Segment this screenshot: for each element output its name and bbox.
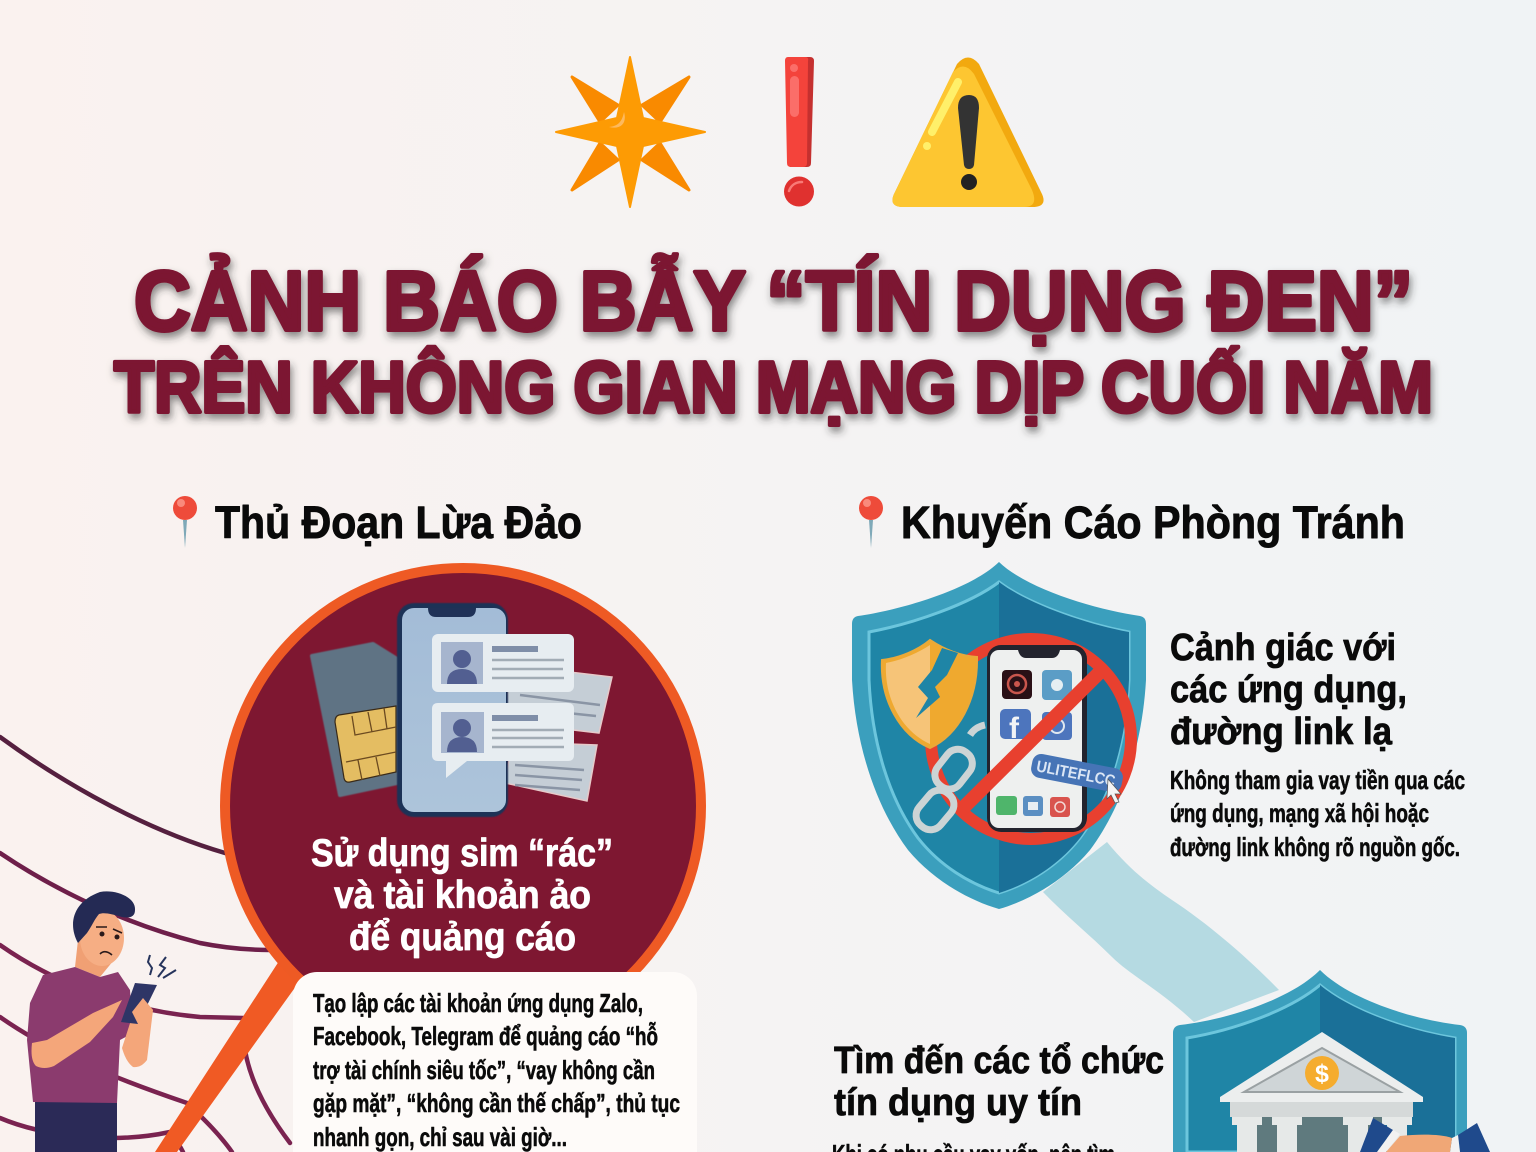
illustration: worried man with phone xyxy=(27,891,176,1152)
cursor xyxy=(1107,779,1121,803)
text: be alert advice xyxy=(1170,627,1465,862)
heading: scam tactics: Thủ Đoạn Lừa Đảo xyxy=(215,497,582,548)
icon: profile message bottom xyxy=(432,703,574,778)
bank door xyxy=(1257,1117,1383,1152)
vibration marks xyxy=(148,955,176,978)
prohibition ring xyxy=(931,639,1131,839)
prohibition slash xyxy=(963,672,1100,808)
neck xyxy=(75,940,118,977)
shield xyxy=(1173,970,1467,1152)
phone: f xyxy=(1009,712,1020,745)
text: be alert advice: Cảnh giác với xyxy=(1170,627,1396,669)
icon: shield crossed app xyxy=(852,562,1146,909)
icon: smartphone xyxy=(397,603,508,817)
face xyxy=(80,910,124,966)
left arm xyxy=(32,1000,122,1068)
broken gold shield xyxy=(882,640,977,748)
white card with description: Facebook, Telegram để quảng cáo “hỗ xyxy=(313,1021,658,1051)
white card with description xyxy=(293,972,697,1152)
white card with description: trợ tài chính siêu tốc”, “vay không cần xyxy=(313,1055,655,1085)
phone xyxy=(987,645,1087,832)
white card with description: Tạo lập các tài khoản ứng dụng Zalo, xyxy=(313,988,643,1018)
eyes and mouth xyxy=(96,927,122,955)
white card with description: nhanh gọn, chỉ sau vài giờ... xyxy=(313,1122,567,1152)
bank columns xyxy=(1232,1117,1412,1152)
phone xyxy=(121,983,157,1024)
heading: prevention advice: Khuyến Cáo Phòng Tránh xyxy=(901,497,1405,548)
coin xyxy=(1305,1056,1339,1090)
bank entablature xyxy=(1230,1102,1413,1117)
bank roof xyxy=(1220,1032,1423,1102)
title: CẢNH BÁO BẪY “TÍN DỤNG ĐEN” xyxy=(134,254,1413,348)
hand on phone xyxy=(132,998,153,1030)
text: trusted lenders advice: tín dụng uy tín xyxy=(834,1082,1082,1124)
red circle xyxy=(225,568,701,1044)
shield xyxy=(852,562,1146,909)
icon: yellow warning triangle xyxy=(892,58,1044,207)
URL pill: ULITEFLCC xyxy=(1035,758,1117,790)
panel: scam speech bubble xyxy=(155,568,701,1152)
handshake xyxy=(1360,1118,1490,1152)
icon: back message cards xyxy=(505,665,612,801)
circle heading: Sử dụng sim “rác” xyxy=(311,832,613,875)
circle heading: để quảng cáo xyxy=(349,916,576,959)
icon: orange star xyxy=(556,57,705,207)
web of debt lines xyxy=(0,737,290,1152)
right arm xyxy=(122,997,153,1067)
icon: shield with bank and handshake: $ xyxy=(1315,1060,1329,1088)
icon: red exclamation mark xyxy=(784,57,814,206)
circle heading xyxy=(311,832,613,959)
icon: profile message top xyxy=(432,634,574,692)
icon: SIM card xyxy=(312,644,397,795)
text: be alert advice: các ứng dụng, xyxy=(1170,669,1407,711)
text: be alert advice: ứng dụng, mạng xã hội hoặc xyxy=(1170,798,1429,828)
circle heading: và tài khoản ảo xyxy=(334,874,591,917)
title xyxy=(114,254,1433,428)
icon: shield with bank and handshake xyxy=(1173,970,1490,1152)
broken chain xyxy=(911,725,985,835)
text: be alert advice: đường link lạ xyxy=(1170,711,1393,753)
text: trusted lenders advice: Tìm đến các tổ chức xyxy=(834,1040,1164,1082)
connector ribbon xyxy=(1043,842,1279,1022)
hair xyxy=(73,891,135,943)
title: TRÊN KHÔNG GIAN MẠNG DỊP CUỐI NĂM xyxy=(114,346,1433,428)
shirt xyxy=(27,967,133,1103)
white card with description: gặp mặt”, “không cần thế chấp”, thủ tục xyxy=(313,1088,680,1118)
text: trusted lenders advice xyxy=(832,1040,1164,1152)
trousers xyxy=(35,1100,117,1152)
speech bubble tail xyxy=(155,925,304,1152)
